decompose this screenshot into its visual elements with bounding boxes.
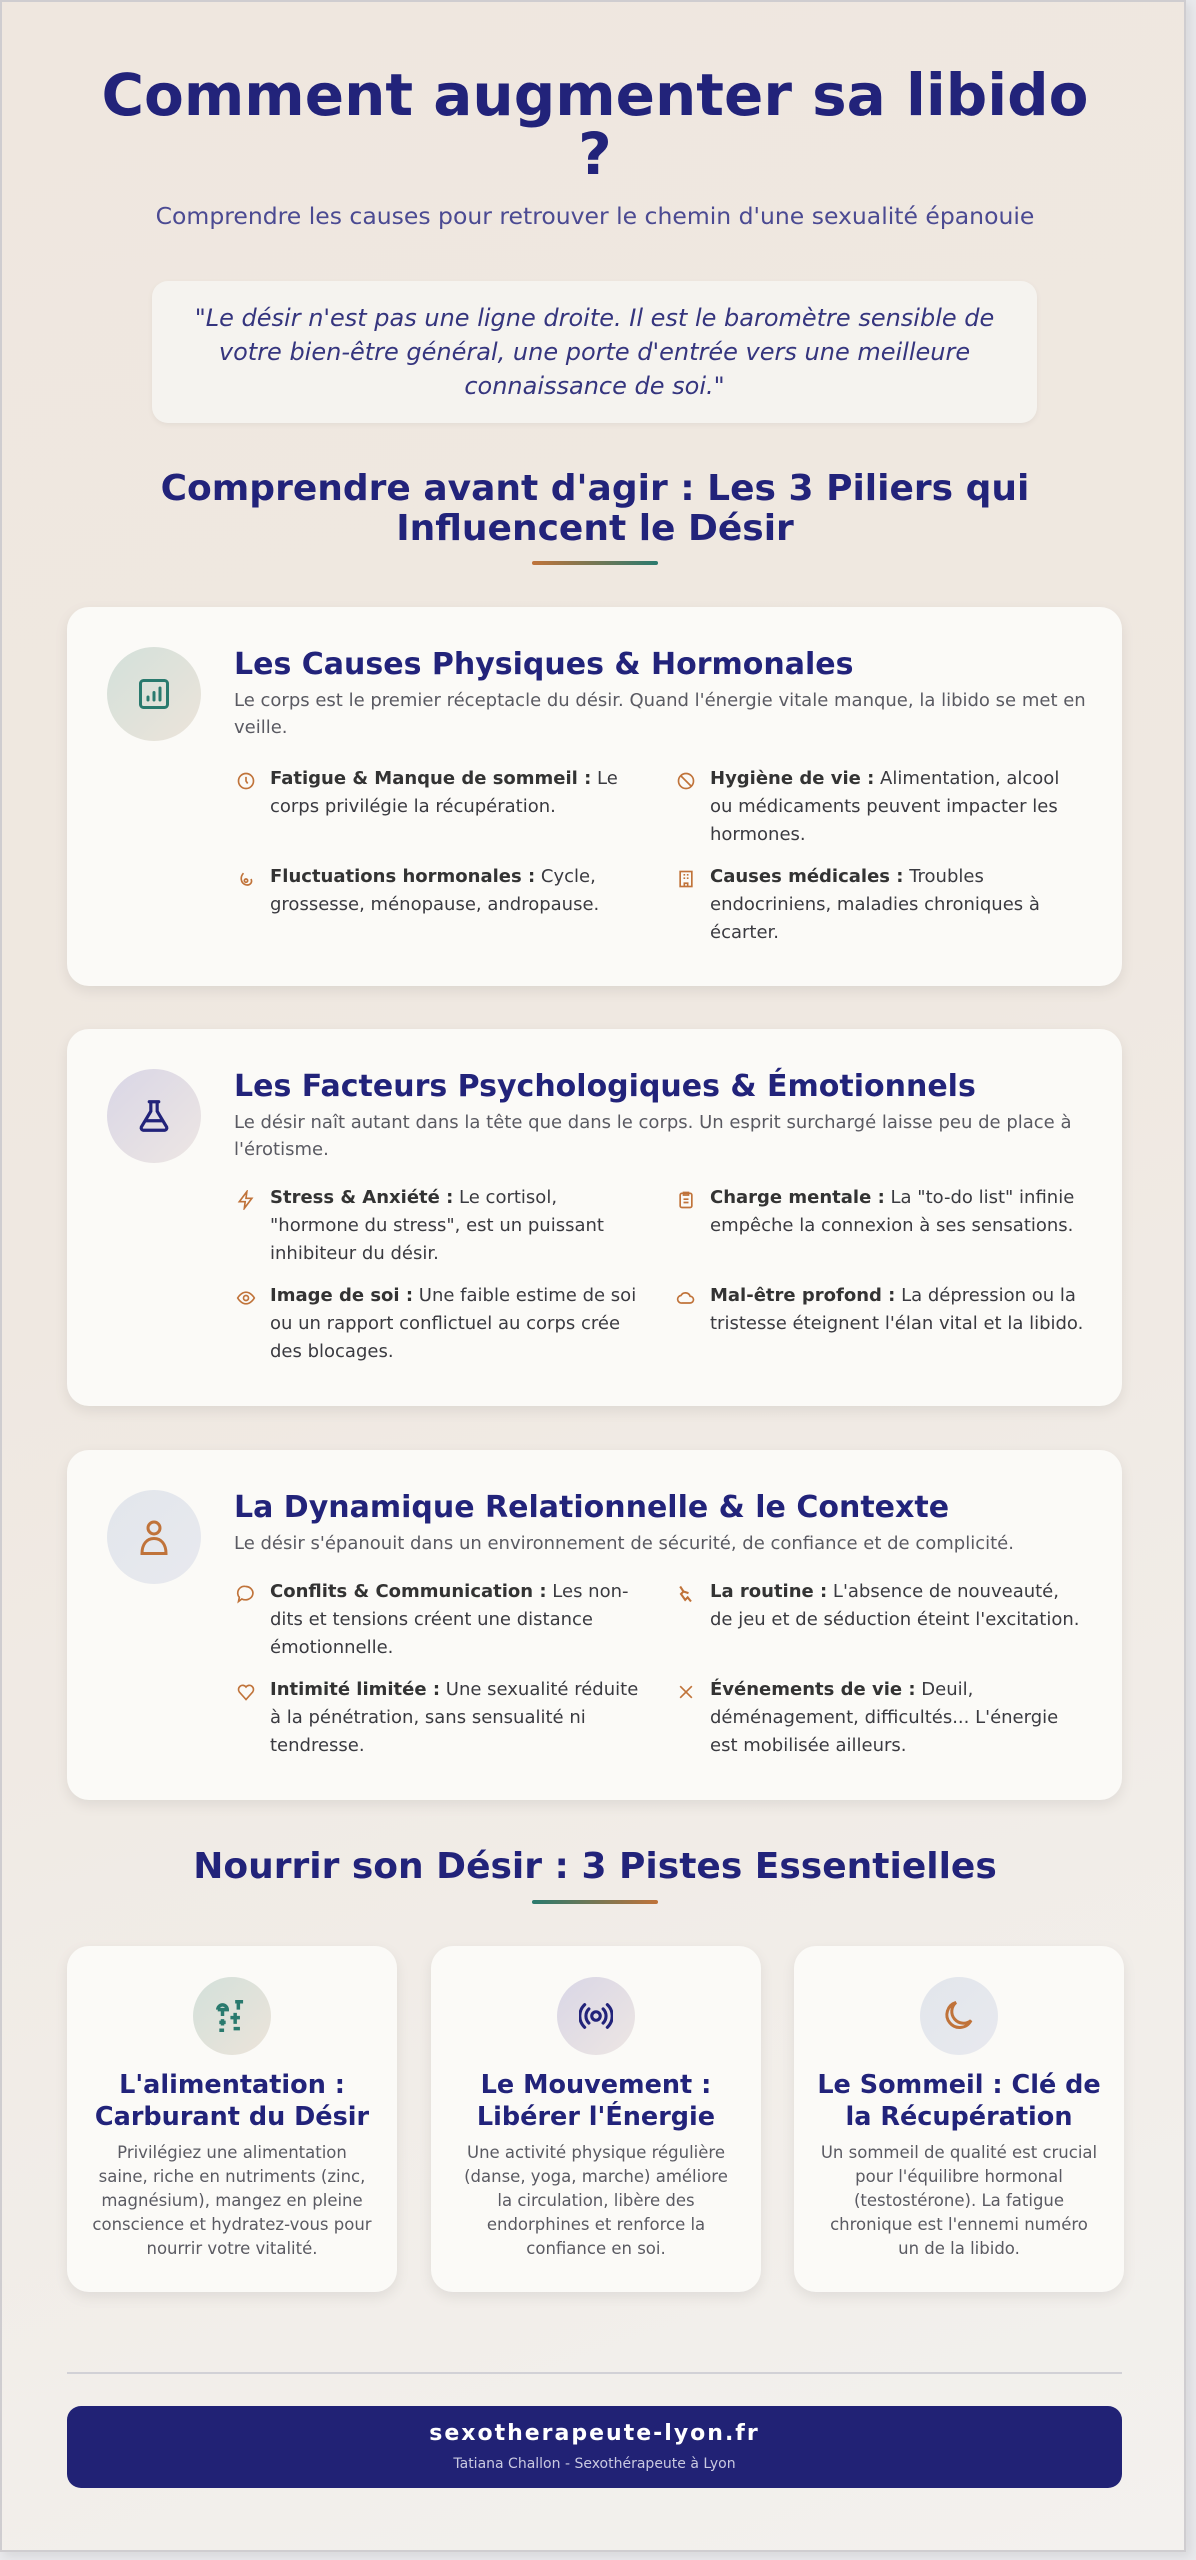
subtitle: Comprendre les causes pour retrouver le chemin d'une sexualité épanouie (156, 202, 1034, 230)
title (101, 61, 1089, 188)
items: Événements de vie : Deuil, déménagement, difficultés... L'énergie est mobilisée ailleurs. (710, 1679, 1058, 1756)
items: La routine : L'absence de nouveauté, de jeu et de séduction éteint l'excitation. (710, 1581, 1080, 1630)
items: Fatigue & Manque de sommeil : Le corps privilégie la récupération. (270, 768, 618, 817)
panel: alimentation (67, 1946, 397, 2292)
card description: Le désir naît autant dans la tête que dans le corps. Un esprit surchargé laisse peu de place à l'érotisme. (234, 1112, 1072, 1160)
items: Mal-être profond : La dépression ou la tristesse éteignent l'élan vital et la libido. (710, 1285, 1083, 1334)
quote box (152, 281, 1037, 423)
tip title: L'alimentation : Carburant du Désir (95, 2070, 369, 2132)
items: Fluctuations hormonales : Cycle, grossesse, ménopause, andropause. (270, 866, 599, 915)
card title: Les Facteurs Psychologiques & Émotionnels (234, 1069, 976, 1104)
icon: person (107, 1490, 201, 1584)
icon: chart (107, 647, 201, 741)
card title: La Dynamique Relationnelle & le Contexte (234, 1490, 949, 1525)
panel: mouvement (431, 1946, 761, 2292)
items: Intimité limitée : Une sexualité réduite à la pénétration, sans sensualité ni tendresse. (270, 1679, 638, 1756)
items: Hygiène de vie : Alimentation, alcool ou médicaments peuvent impacter les hormones. (710, 768, 1059, 845)
icon: moon (920, 1977, 998, 2055)
title: ? (578, 120, 612, 188)
icon: flask (107, 1069, 201, 1163)
tip title: Le Mouvement : Libérer l'Énergie (477, 2070, 715, 2132)
heading underline (532, 1900, 658, 1904)
card title: Les Causes Physiques & Hormonales (234, 647, 853, 682)
heading: 3 pistes: Nourrir son Désir : 3 Pistes Essentielles (193, 1846, 997, 1887)
footer author: Tatiana Challon - Sexothérapeute à Lyon (453, 2456, 736, 2472)
items (236, 1581, 1080, 1756)
quote box: "Le désir n'est pas une ligne droite. Il est le baromètre sensible de votre bien-être général, une porte d'entrée vers une meilleure connaissance de soi." (195, 304, 994, 400)
footer url: sexotherapeute-lyon.fr (429, 2421, 760, 2446)
panel: facteurs psychologiques (67, 1029, 1122, 1406)
heading underline (532, 561, 658, 565)
panel: causes physiques (67, 607, 1122, 986)
tip text: Une activité physique régulière (danse, yoga, marche) améliore la circulation, libère des endorphines et renforce la confiance en soi. (464, 2143, 728, 2258)
heading: 3 piliers: Comprendre avant d'agir : Les 3 Piliers qui Influencent le Désir (161, 468, 1029, 549)
panel: dynamique relationnelle (67, 1450, 1122, 1800)
items: Image de soi : Une faible estime de soi ou un rapport conflictuel au corps crée des blocages. (270, 1285, 636, 1362)
icon: radiate (557, 1977, 635, 2055)
tip text: Privilégiez une alimentation saine, riche en nutriments (zinc, magnésium), mangez en pleine conscience et hydratez-vous pour nourrir votre vitalité. (92, 2143, 372, 2258)
items: Charge mentale : La "to-do list" infinie empêche la connexion à ses sensations. (710, 1187, 1074, 1236)
icon: nutrition (193, 1977, 271, 2055)
tip text: Un sommeil de qualité est crucial pour l'équilibre hormonal (testostérone). La fatigue chronique est l'ennemi numéro un de la libido. (821, 2143, 1097, 2258)
items: Causes médicales : Troubles endocriniens, maladies chroniques à écarter. (710, 866, 1040, 943)
items: Conflits & Communication : Les non-dits et tensions créent une distance émotionnelle. (270, 1581, 629, 1658)
items (236, 1187, 1083, 1362)
tip title: Le Sommeil : Clé de la Récupération (817, 2070, 1101, 2132)
panel: sommeil (794, 1946, 1124, 2292)
card description: Le corps est le premier réceptacle du désir. Quand l'énergie vitale manque, la libido se met en veille. (234, 690, 1086, 738)
items (238, 768, 1059, 943)
footer (67, 2406, 1122, 2488)
title: Comment augmenter sa libido (101, 61, 1089, 129)
card description: Le désir s'épanouit dans un environnement de sécurité, de confiance et de complicité. (234, 1533, 1014, 1554)
items: Stress & Anxiété : Le cortisol, "hormone du stress", est un puissant inhibiteur du désir. (270, 1187, 604, 1264)
